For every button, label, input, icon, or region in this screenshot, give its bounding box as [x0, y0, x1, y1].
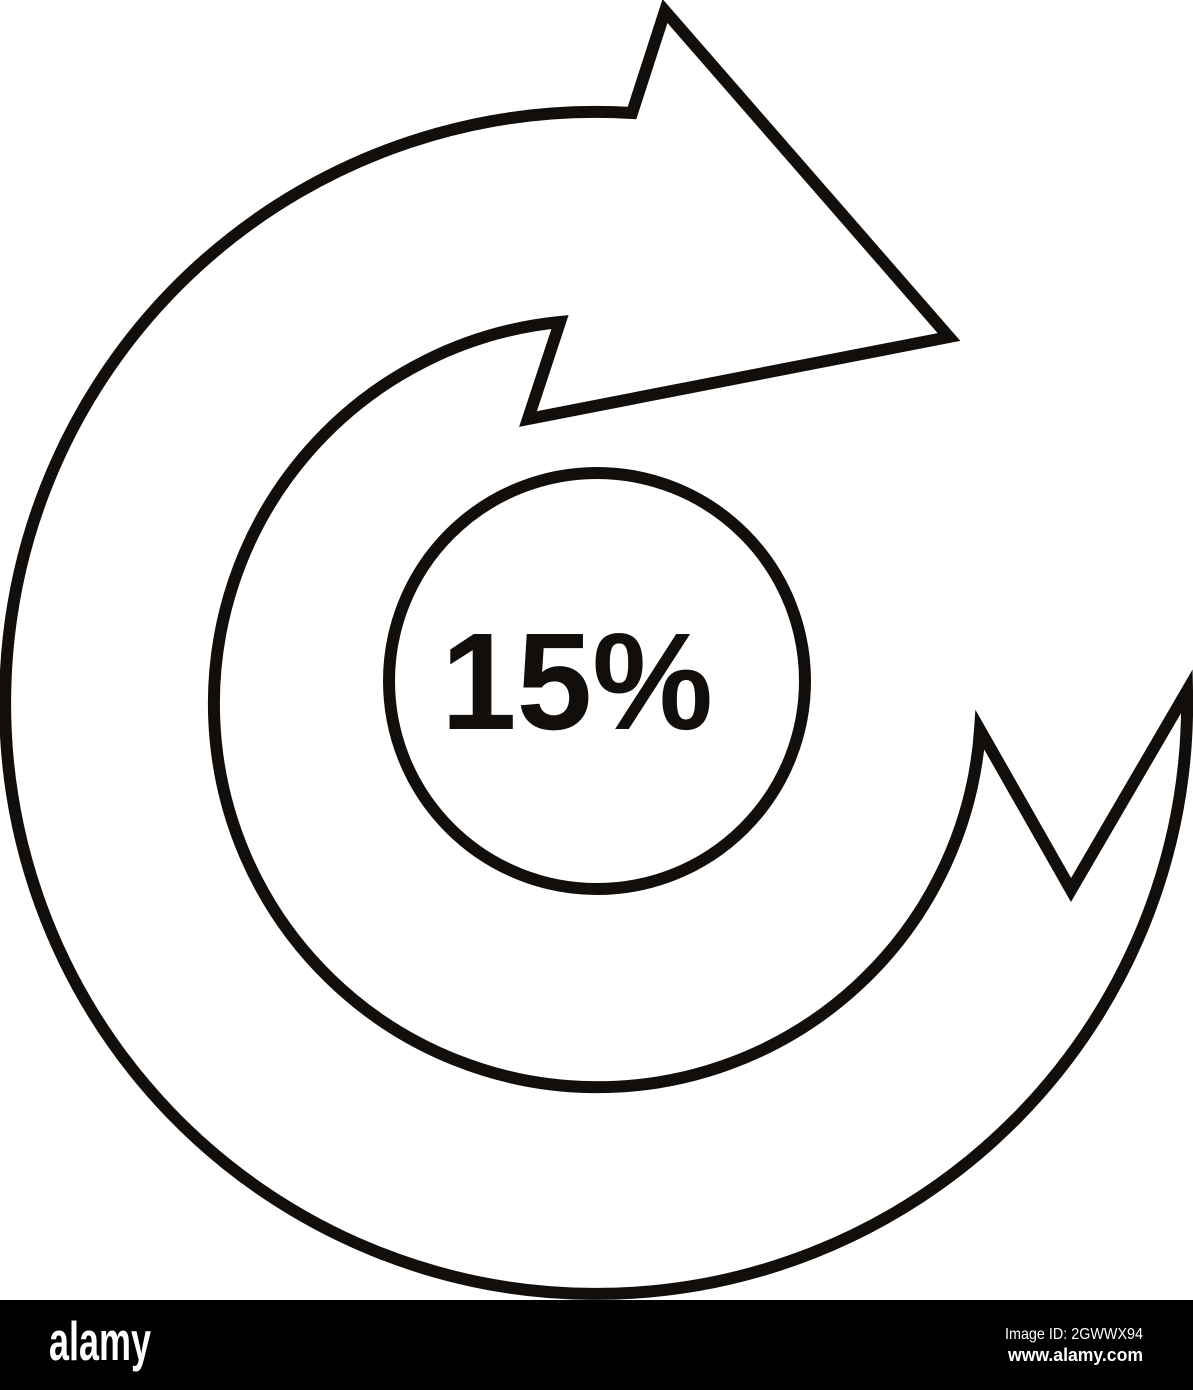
website: www.alamy.com: [1007, 1345, 1143, 1365]
footer logo: alamy: [49, 1310, 151, 1372]
percentage value: 15%: [441, 605, 713, 759]
footer bar: [0, 1300, 1193, 1390]
image id: Image ID: 2GWWX94: [1005, 1326, 1143, 1343]
center circle: [389, 473, 805, 889]
